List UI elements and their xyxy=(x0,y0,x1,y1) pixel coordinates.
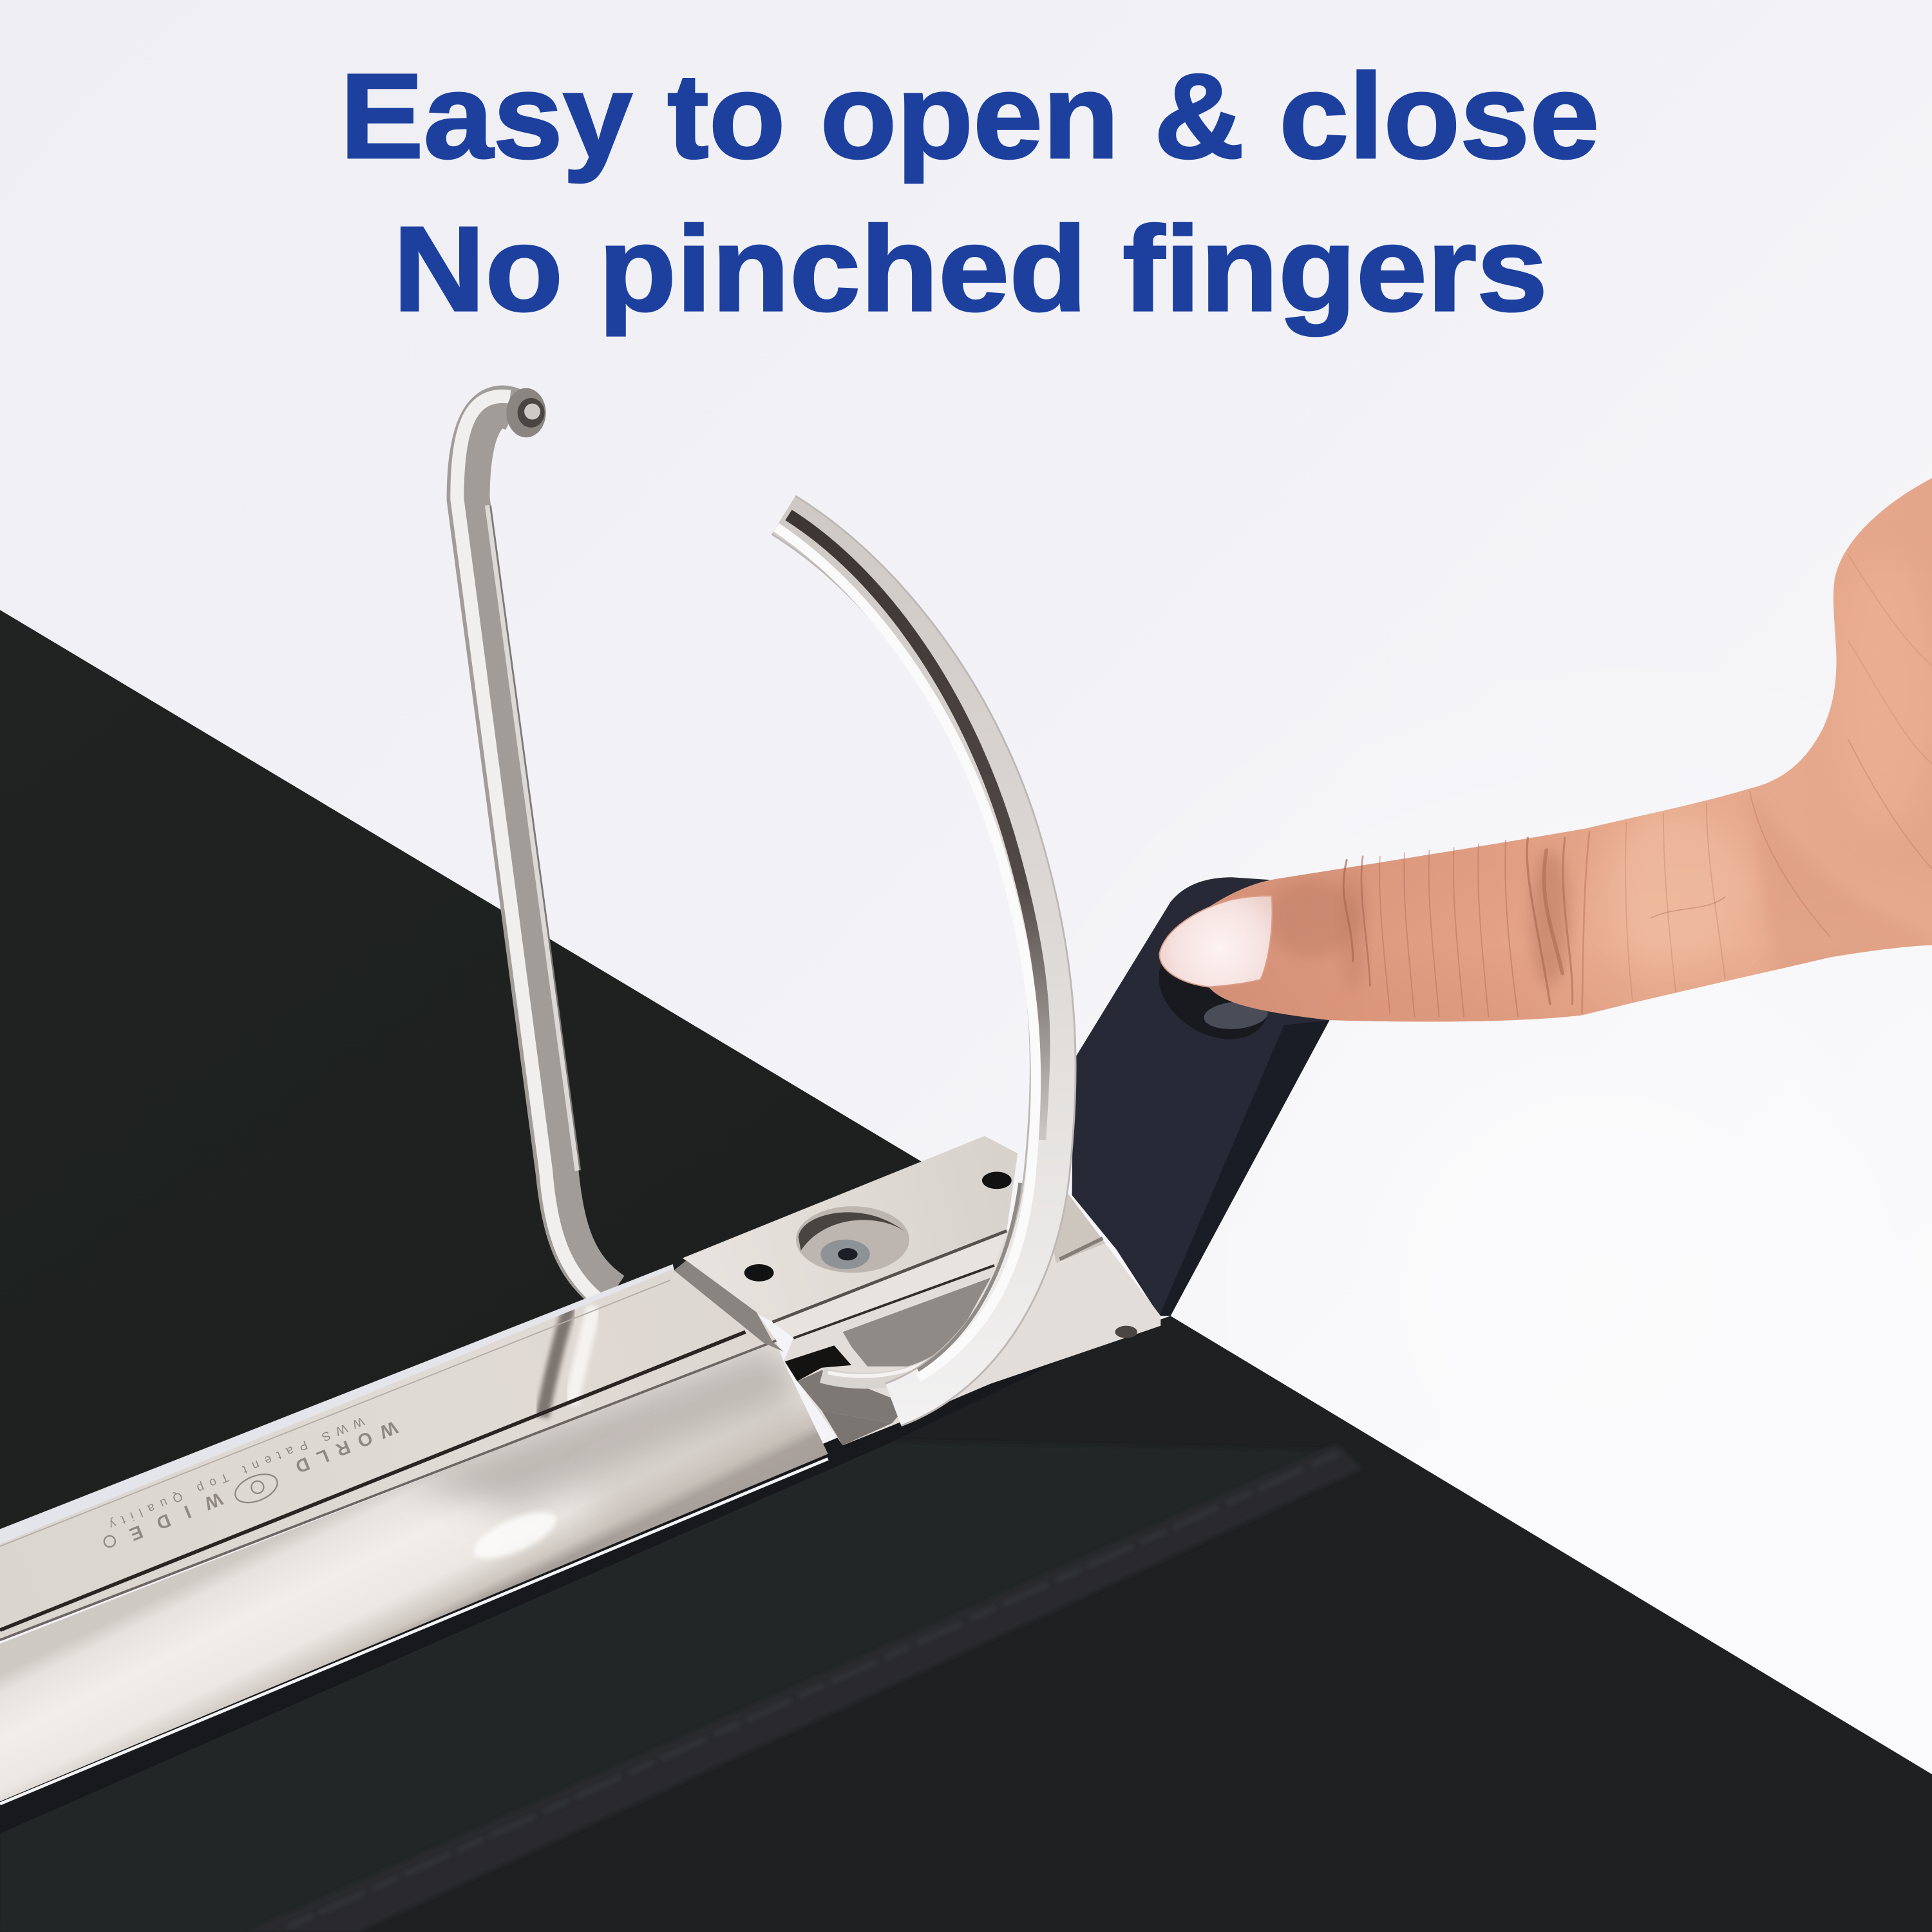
ring cap xyxy=(506,388,546,437)
title xyxy=(340,48,1599,336)
binder cover: lower black panel xyxy=(0,1316,1932,1932)
title line 2: No pinched fingers xyxy=(393,201,1548,336)
flange reflection xyxy=(542,1306,594,1417)
ring root xyxy=(822,1282,998,1381)
knuckle creases xyxy=(1343,554,1932,1016)
face reflections xyxy=(416,1342,809,1560)
lever press dimple xyxy=(1141,925,1286,1059)
title line 1: Easy to open & close xyxy=(340,48,1599,184)
rivet hole xyxy=(796,1206,909,1273)
fingernail xyxy=(1159,896,1272,987)
rivet xyxy=(1115,1326,1137,1338)
finger and hand xyxy=(1159,478,1932,1021)
lever xyxy=(1072,877,1329,1316)
engraved text: WIDE xyxy=(126,1488,225,1544)
engraved text: WWS Patent Top Quality xyxy=(107,1414,366,1531)
engraved logo xyxy=(104,1469,281,1547)
right ring xyxy=(776,515,1053,1405)
binder cover: left black panel xyxy=(0,610,936,1614)
ring mechanism housing xyxy=(773,1194,1160,1445)
finger shading xyxy=(1265,554,1932,992)
binder metal bar xyxy=(0,1264,828,1804)
left ring xyxy=(457,388,612,1300)
top plate xyxy=(674,1136,1018,1352)
small holes xyxy=(982,1172,1012,1189)
slot xyxy=(785,1345,851,1381)
engraved text: WORLD xyxy=(292,1417,401,1477)
recess xyxy=(843,1278,990,1367)
